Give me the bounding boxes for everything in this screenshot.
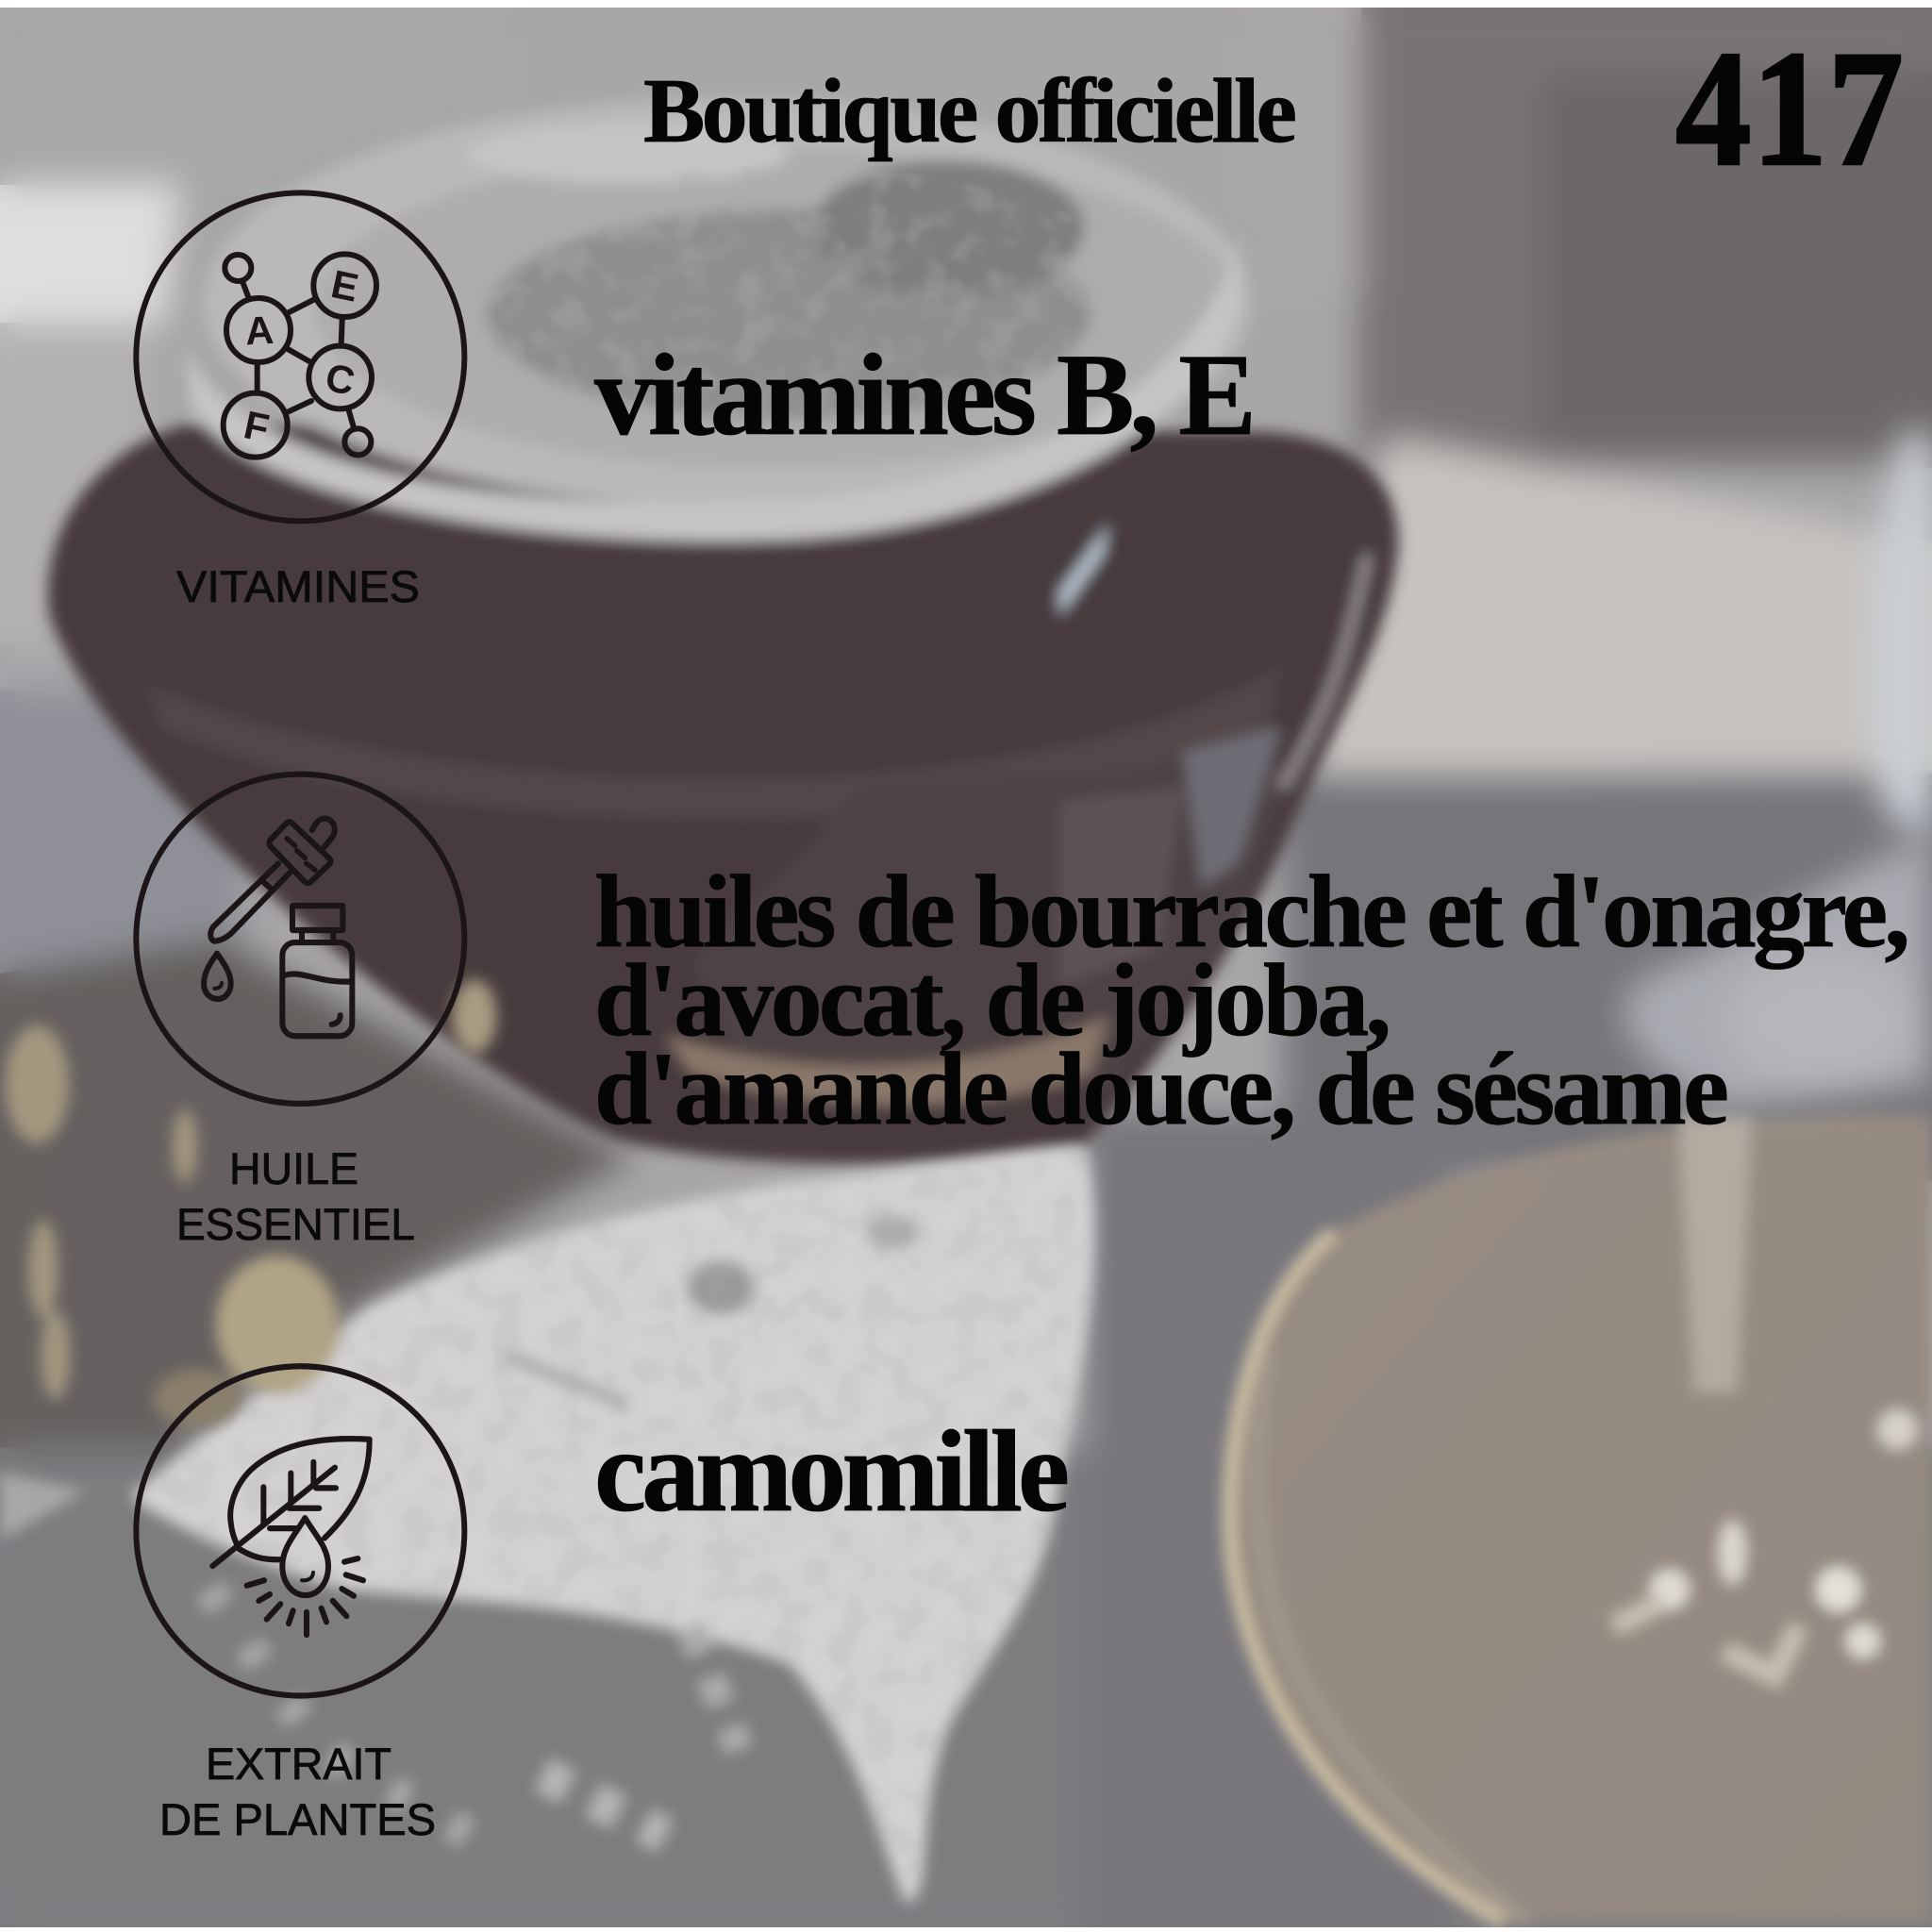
icon: vitamins: F [241, 402, 273, 450]
icon: vitamins: A [244, 308, 275, 353]
icon: vitamins: E [327, 261, 362, 310]
stone [0, 1146, 1094, 1904]
label: huile essentiel: HUILE [229, 1143, 358, 1193]
heading: boutique officielle: Boutique officielle [643, 60, 1297, 162]
text: huiles list: d'avocat, de jojoba, [594, 942, 1391, 1058]
icon: vitamins [136, 192, 464, 521]
panel: extrait de plantes: DE PLANTES [159, 1794, 436, 1844]
icon: dropper and bottle [136, 774, 464, 1104]
right glass [1624, 431, 1932, 1109]
text: huiles list: d'amande douce, de sésame [594, 1031, 1729, 1146]
gold details [5, 979, 496, 1428]
lid [1229, 1114, 1932, 1923]
text: huiles list [594, 854, 1910, 1146]
panel: huile essentiel: ESSENTIEL [176, 1199, 415, 1249]
label: extrait de plantes: EXTRAIT [206, 1739, 391, 1789]
powder texture [419, 166, 1158, 450]
number 417: 417 [1675, 17, 1904, 201]
icon: leaf and drop [136, 1366, 464, 1695]
text: camomille: camomille [594, 1407, 1070, 1536]
text: huiles list: huiles de bourrache et d'onagre, [594, 854, 1910, 969]
icon: vitamins: C [322, 355, 358, 404]
stone texture [129, 1146, 1094, 1904]
text: vitamines B, E: vitamines B, E [594, 330, 1257, 459]
panel: huile essentiel [136, 774, 464, 1249]
label: vitamines: VITAMINES [176, 561, 420, 611]
panel: extrait de plantes [136, 1366, 464, 1844]
jar [48, 98, 1398, 1164]
panel: vitamines [136, 192, 464, 611]
